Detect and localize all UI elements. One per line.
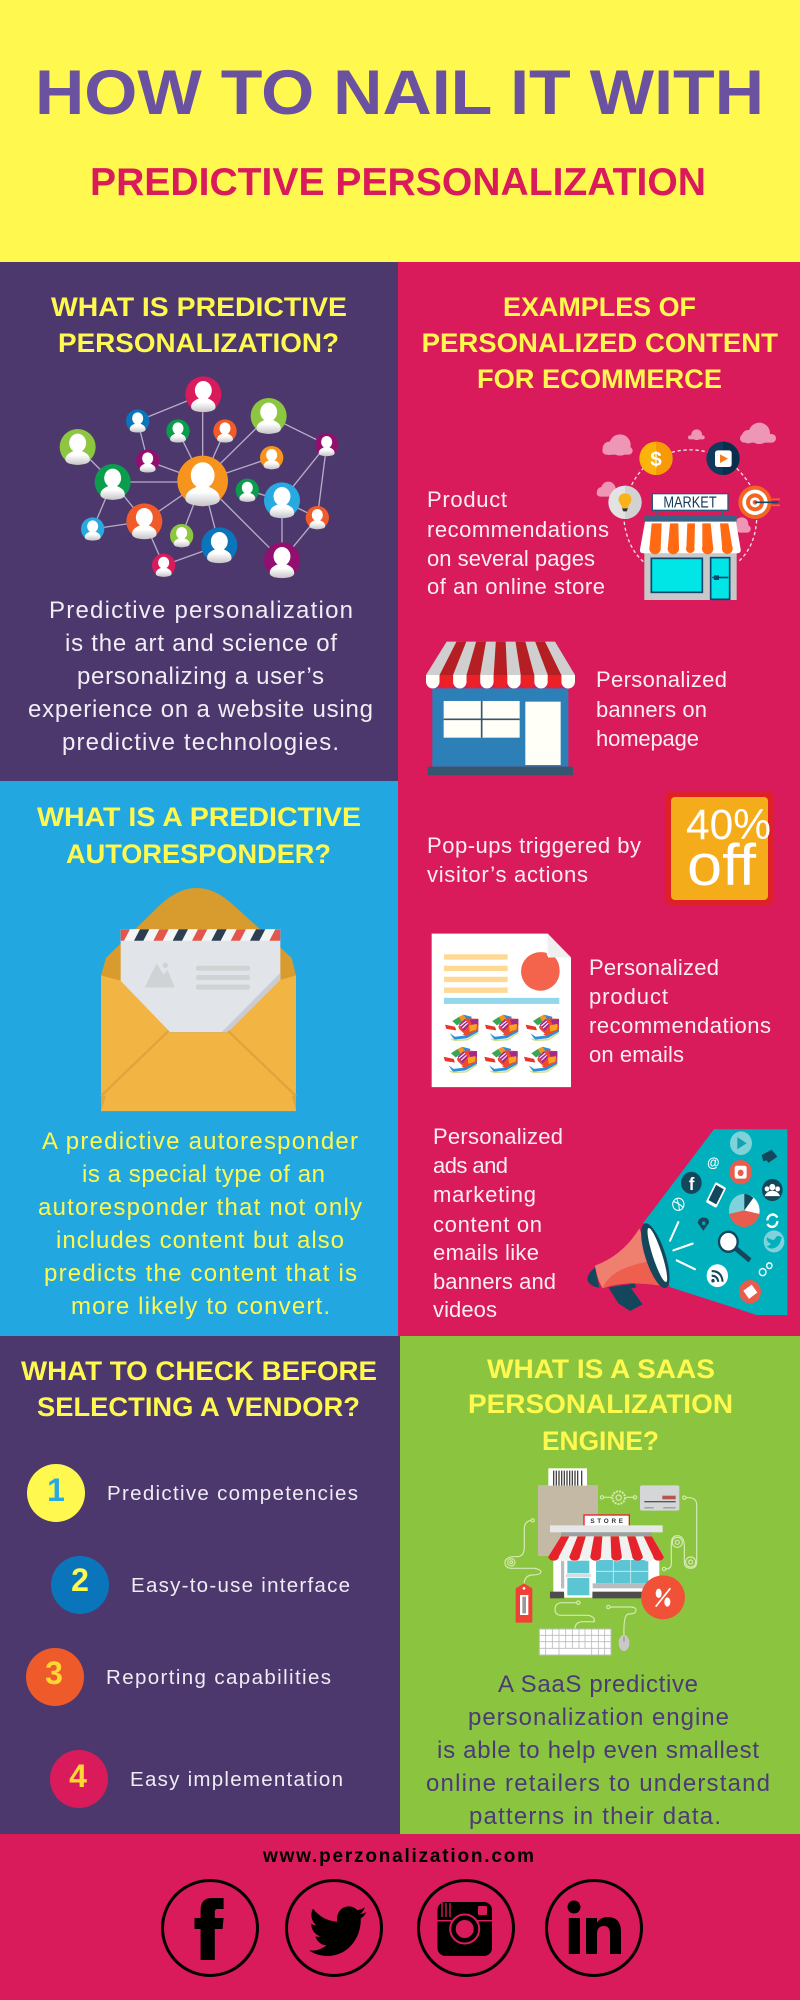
heading: FOR ECOMMERCE — [477, 364, 722, 394]
heading: WHAT IS A PREDICTIVE — [37, 802, 361, 832]
body text: predicts the content that is — [44, 1260, 357, 1287]
text: ads and marketing — [433, 1124, 563, 1322]
title: HOW TO NAIL IT WITH — [35, 58, 764, 128]
icon: email with shoes — [432, 934, 571, 1087]
panel: what to check before selecting a vendor — [0, 1336, 400, 1834]
text: pop-ups — [427, 833, 641, 887]
list item 4: 4 — [69, 1758, 87, 1794]
icon: online store illustration — [505, 1468, 697, 1655]
heading — [468, 1354, 733, 1456]
list item 3: Reporting capabilities — [106, 1666, 331, 1689]
body text: personalization engine — [468, 1704, 729, 1731]
list item 3: 3 — [45, 1655, 63, 1691]
icon: megaphone with social icons — [587, 1129, 787, 1315]
text: ads and marketing: content on — [433, 1212, 542, 1237]
icon: linkedin — [546, 1880, 642, 1976]
body text: is a special type of an — [82, 1161, 325, 1188]
icon: people network — [60, 376, 338, 578]
list item 2: 2 — [71, 1562, 89, 1598]
body text: patterns in their data. — [469, 1803, 721, 1830]
text: product recommendations: of an online store — [427, 574, 605, 599]
text: ads and marketing: emails like — [433, 1240, 539, 1265]
text: ads and marketing: ads and — [433, 1153, 508, 1178]
website url: www.perzonalization.com — [262, 1846, 534, 1867]
heading: PERSONALIZED CONTENT — [422, 328, 779, 358]
text: product recommendations: recommendations — [427, 517, 609, 542]
text: product recommendations on emails: on emails — [589, 1042, 684, 1067]
text: ads and marketing: videos — [433, 1297, 497, 1322]
text: product recommendations — [427, 487, 609, 599]
icon: market with orbiting icons: MARKET — [663, 494, 717, 511]
icon: online store illustration: STORE — [590, 1518, 623, 1525]
heading: PERSONALIZATION? — [58, 328, 339, 358]
text: product recommendations: Product — [427, 487, 507, 512]
text: personalized banners: Personalized — [596, 667, 727, 692]
icon: megaphone with social icons: @ — [707, 1154, 720, 1170]
text: ads and marketing: marketing — [433, 1182, 536, 1207]
list item 3 — [26, 1648, 331, 1706]
heading — [422, 292, 779, 394]
list item 1: Predictive competencies — [107, 1482, 358, 1505]
body text: more likely to convert. — [71, 1293, 330, 1320]
body text: is able to help even smallest — [437, 1737, 759, 1764]
text: ads and marketing: Personalized — [433, 1124, 563, 1149]
icon: instagram — [418, 1880, 514, 1976]
text: pop-ups: Pop-ups triggered by — [427, 833, 641, 858]
icon: facebook — [162, 1880, 258, 1976]
list item 4: Easy implementation — [130, 1768, 343, 1791]
icon: storefront — [426, 642, 575, 775]
heading: PERSONALIZATION — [468, 1389, 733, 1419]
icon: market with orbiting icons: $ — [650, 448, 662, 471]
text: ads and marketing: banners and — [433, 1269, 556, 1294]
icon: market with orbiting icons — [597, 423, 780, 600]
text: product recommendations on emails: product — [589, 984, 668, 1009]
heading: WHAT IS PREDICTIVE — [51, 292, 347, 322]
body text: personalizing a user’s — [77, 663, 324, 690]
footer panel — [0, 1834, 800, 2000]
body text: autoresponder that not only — [38, 1194, 362, 1221]
text: product recommendations on emails — [589, 955, 771, 1067]
list item 1 — [27, 1464, 358, 1522]
list item 1: 1 — [47, 1472, 65, 1508]
body text: A predictive autoresponder — [42, 1128, 358, 1155]
text: product recommendations on emails: Personalized — [589, 955, 719, 980]
text: product recommendations: on several pages — [427, 546, 595, 571]
subtitle: PREDICTIVE PERSONALIZATION — [90, 161, 706, 204]
panel: examples of personalized content — [398, 262, 800, 1336]
body text: A SaaS predictive — [498, 1671, 698, 1698]
text: personalized banners — [596, 667, 727, 751]
panel: what is a saas personalization engine — [400, 1336, 800, 1834]
body text: predictive technologies. — [62, 729, 339, 756]
body text — [38, 1128, 362, 1320]
heading: WHAT TO CHECK BEFORE — [21, 1356, 377, 1386]
panel: what is a predictive autoresponder — [0, 781, 398, 1336]
panel: what is predictive personalization — [0, 262, 398, 781]
body text — [426, 1671, 770, 1830]
icon: 40% off badge: 40% — [686, 801, 771, 849]
body text — [28, 597, 373, 756]
icon: 40% off badge: off — [687, 833, 757, 898]
body text: online retailers to understand — [426, 1770, 770, 1797]
text: personalized banners: banners on — [596, 697, 707, 722]
heading — [21, 1356, 377, 1422]
list item 2: Easy-to-use interface — [131, 1574, 350, 1597]
header panel — [0, 0, 800, 262]
list item 4 — [50, 1750, 343, 1808]
body text: Predictive personalization — [49, 597, 353, 624]
text: pop-ups: visitor’s actions — [427, 862, 588, 887]
icon: open envelope — [101, 888, 296, 1111]
text: personalized banners: homepage — [596, 726, 699, 751]
icon: megaphone with social icons: f — [689, 1173, 695, 1194]
heading — [37, 802, 361, 869]
heading: AUTORESPONDER? — [66, 839, 331, 869]
heading: ENGINE? — [542, 1426, 659, 1456]
text: product recommendations on emails: recommendations — [589, 1013, 771, 1038]
list item 2 — [51, 1556, 350, 1614]
body text: includes content but also — [56, 1227, 344, 1254]
icon: 40% off badge — [666, 791, 773, 905]
heading — [51, 292, 347, 358]
heading: EXAMPLES OF — [503, 292, 696, 322]
body text: is the art and science of — [65, 630, 337, 657]
heading: WHAT IS A SAAS — [487, 1354, 715, 1384]
heading: SELECTING A VENDOR? — [37, 1392, 360, 1422]
icon: twitter — [286, 1880, 382, 1976]
body text: experience on a website using — [28, 696, 373, 723]
